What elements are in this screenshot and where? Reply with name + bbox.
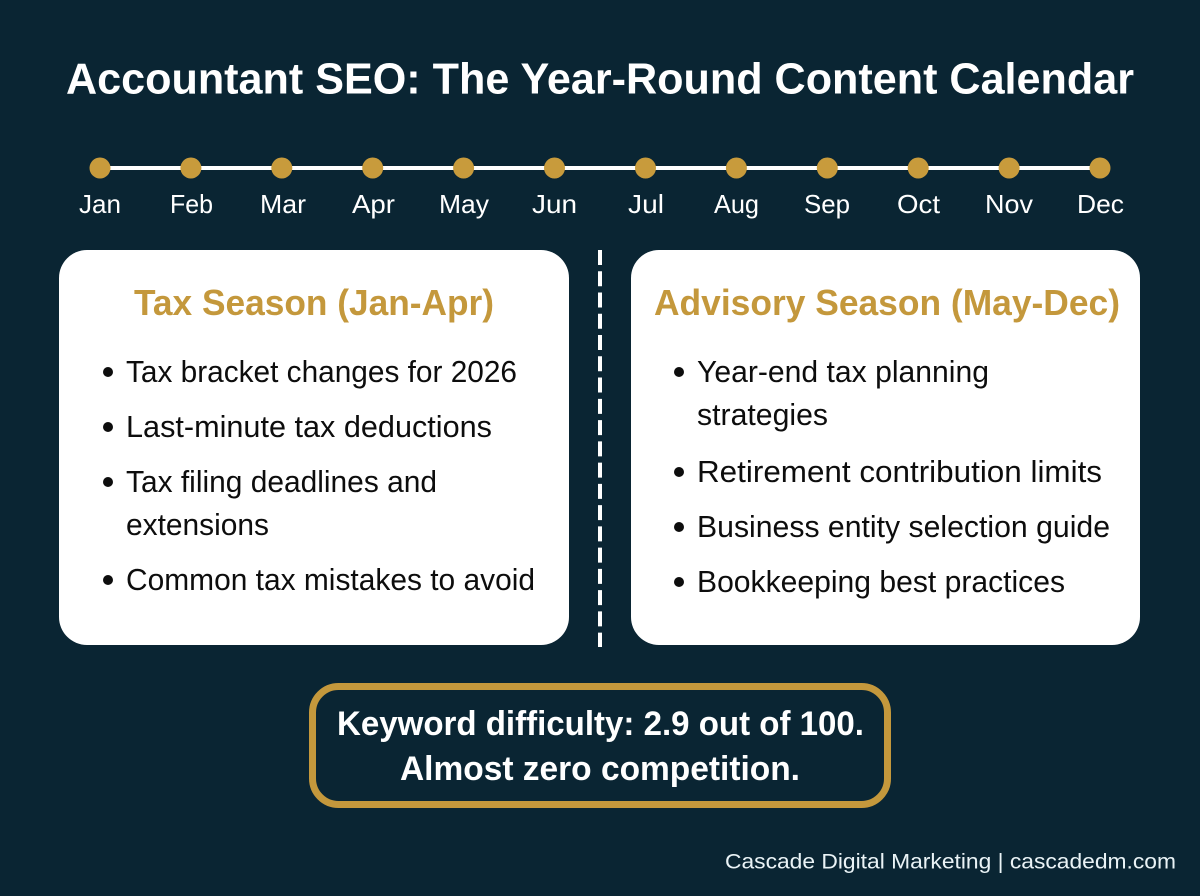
callout text	[337, 705, 864, 788]
month labels: Feb	[170, 189, 213, 219]
list: tax season topics	[103, 354, 535, 597]
month labels: Aug	[714, 189, 759, 219]
title: Accountant SEO: The Year-Round Content Calendar	[66, 56, 1134, 104]
month labels: Dec	[1077, 189, 1124, 219]
timeline	[79, 158, 1124, 219]
month labels: Jul	[628, 189, 664, 219]
list: advisory season topics: Retirement contribution limits	[697, 454, 1102, 489]
heading: tax season: Tax Season (Jan-Apr)	[134, 282, 494, 323]
list: tax season topics: extensions	[126, 507, 269, 542]
panel: advisory season	[631, 250, 1140, 645]
list: tax season topics: Common tax mistakes to avoid	[126, 562, 535, 597]
list: advisory season topics: Year-end tax planning	[697, 354, 989, 389]
month labels: Apr	[352, 189, 395, 219]
month labels	[79, 189, 1124, 219]
list: tax season topics: Tax filing deadlines and	[126, 464, 437, 499]
month labels: Sep	[804, 189, 850, 219]
list: tax season topics: Last-minute tax deductions	[126, 409, 492, 444]
list: tax season topics: Tax bracket changes for 2026	[126, 354, 517, 389]
month labels: Jan	[79, 189, 121, 219]
month markers	[90, 158, 1110, 178]
footer credit: Cascade Digital Marketing | cascadedm.com	[725, 850, 1176, 874]
month labels: Mar	[260, 189, 306, 219]
list: advisory season topics: Business entity selection guide	[697, 509, 1110, 544]
callout	[312, 686, 888, 804]
callout text: Keyword difficulty: 2.9 out of 100.	[337, 705, 864, 743]
panel: tax season	[59, 250, 569, 645]
list: advisory season topics	[674, 354, 1110, 599]
month labels: Nov	[985, 189, 1033, 219]
list: advisory season topics: Bookkeeping best practices	[697, 564, 1065, 599]
month labels: May	[439, 189, 489, 219]
divider	[598, 250, 602, 647]
list: advisory season topics: strategies	[697, 397, 828, 432]
heading: advisory season: Advisory Season (May-Dec)	[654, 282, 1120, 323]
month labels: Jun	[532, 189, 577, 219]
month labels: Oct	[897, 189, 941, 219]
callout text: Almost zero competition.	[400, 750, 800, 788]
